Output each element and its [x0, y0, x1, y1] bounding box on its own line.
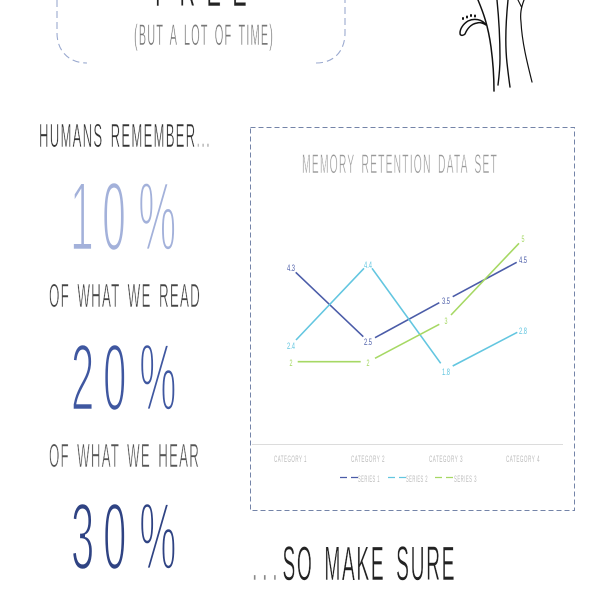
stat: 10 percent: 10%	[70, 162, 176, 271]
line chart: series 2: 2.4	[287, 341, 295, 351]
line chart: series 3: 2	[366, 358, 370, 368]
text: OF WHAT WE READ	[49, 277, 201, 314]
line chart: series 1: 4.3	[287, 263, 295, 273]
chart axis line	[252, 444, 563, 446]
line chart: series 1	[287, 255, 527, 347]
line chart: series 1: 3.5	[442, 296, 450, 306]
text: HUMANS REMEMBER...	[39, 117, 211, 154]
line chart: series 2	[287, 260, 527, 377]
line chart: series 2: 1.8	[442, 367, 450, 377]
legend	[340, 474, 477, 484]
category labels	[274, 454, 540, 464]
line chart: series 1: 4.5	[519, 255, 527, 265]
line chart: series 3	[290, 234, 524, 368]
line chart: series 2: 2.8	[519, 326, 527, 336]
panel: memory retention chart: SERIES 3	[454, 474, 477, 484]
category labels: CATEGORY 1	[274, 454, 307, 464]
line chart: series 1: 2.5	[364, 337, 372, 347]
category labels: CATEGORY 3	[429, 454, 463, 464]
panel: free time callout: (BUT A LOT OF TIME)	[134, 19, 274, 52]
panel: free time callout	[57, 0, 345, 63]
panel: memory retention chart	[250, 128, 574, 510]
stat: 30 percent: 30%	[71, 484, 176, 590]
line chart: series 3: 3	[444, 316, 448, 326]
text: OF WHAT WE HEAR	[49, 437, 200, 474]
category labels: CATEGORY 4	[506, 454, 540, 464]
chart frame	[250, 128, 574, 510]
callout dashed frame	[57, 0, 345, 63]
legend: SERIES 1	[358, 474, 380, 484]
line chart: series 3: 5	[522, 234, 524, 244]
line chart: series 3: 2	[290, 358, 292, 368]
legend: SERIES 2	[406, 474, 428, 484]
line chart: series 2: 4.4	[364, 260, 372, 270]
icon: tree trunk illustration	[460, 0, 532, 91]
stat: 20 percent: 20%	[71, 325, 176, 431]
category labels: CATEGORY 2	[351, 454, 385, 464]
